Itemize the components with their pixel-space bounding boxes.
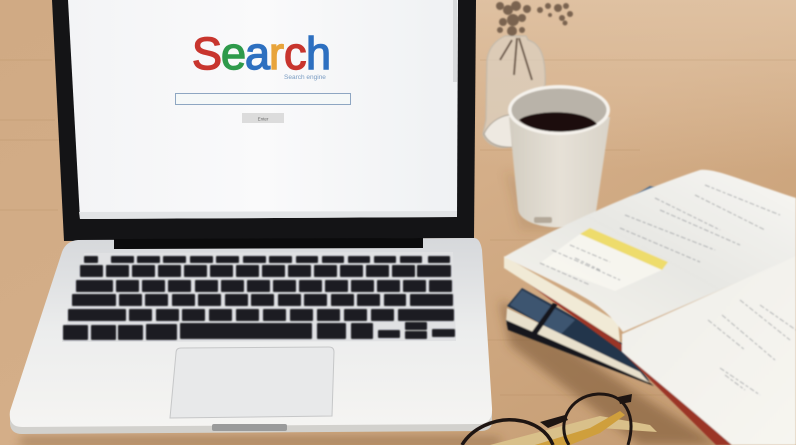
home row [72, 294, 453, 306]
coffee cup [508, 85, 610, 227]
search logo: h [306, 28, 331, 79]
yellow sticky note [580, 228, 668, 270]
search logo: e [221, 28, 246, 79]
elastic band [531, 303, 558, 336]
screen [68, 0, 458, 219]
coffee surface [519, 112, 597, 132]
screen scrollbar [453, 0, 457, 82]
number row [80, 265, 451, 277]
enter button [242, 113, 284, 123]
front rim [10, 410, 492, 434]
left page block [504, 256, 620, 342]
blue notebooks under the open notebook [506, 186, 658, 386]
search logo: S [192, 28, 222, 79]
laptop lid bezel [52, 0, 476, 241]
lens frames [564, 394, 631, 445]
left page [504, 170, 796, 332]
handwriting on pages [540, 185, 796, 395]
laptop base [10, 238, 492, 427]
function row [84, 256, 450, 263]
search logo: r [269, 28, 284, 79]
trackpad [170, 347, 334, 418]
search input box [176, 94, 350, 104]
qwerty row [76, 280, 452, 292]
open notebook [503, 170, 796, 445]
keyboard well [62, 252, 456, 342]
notebook red edge [503, 265, 732, 445]
search logo: a [245, 28, 271, 79]
eyeglasses [462, 394, 657, 445]
search engine subtitle: Search engine [284, 74, 326, 81]
laptop [10, 0, 492, 434]
trackpad latch [212, 424, 287, 431]
dried flowers [496, 1, 573, 36]
notebook and laptop cast shadows [20, 170, 720, 445]
right page [622, 256, 796, 445]
hinge [114, 238, 423, 249]
keyboard [63, 256, 455, 340]
search logo [192, 28, 331, 79]
screen status bar [79, 211, 457, 219]
bottom row [63, 322, 455, 340]
folded temple arms [490, 416, 657, 445]
vase body [483, 36, 545, 147]
glass vase with dried flowers [483, 1, 573, 147]
shift row [68, 309, 454, 321]
enter button: Enter [258, 116, 269, 122]
search logo: c [284, 28, 306, 79]
stacked page edges [506, 308, 650, 384]
